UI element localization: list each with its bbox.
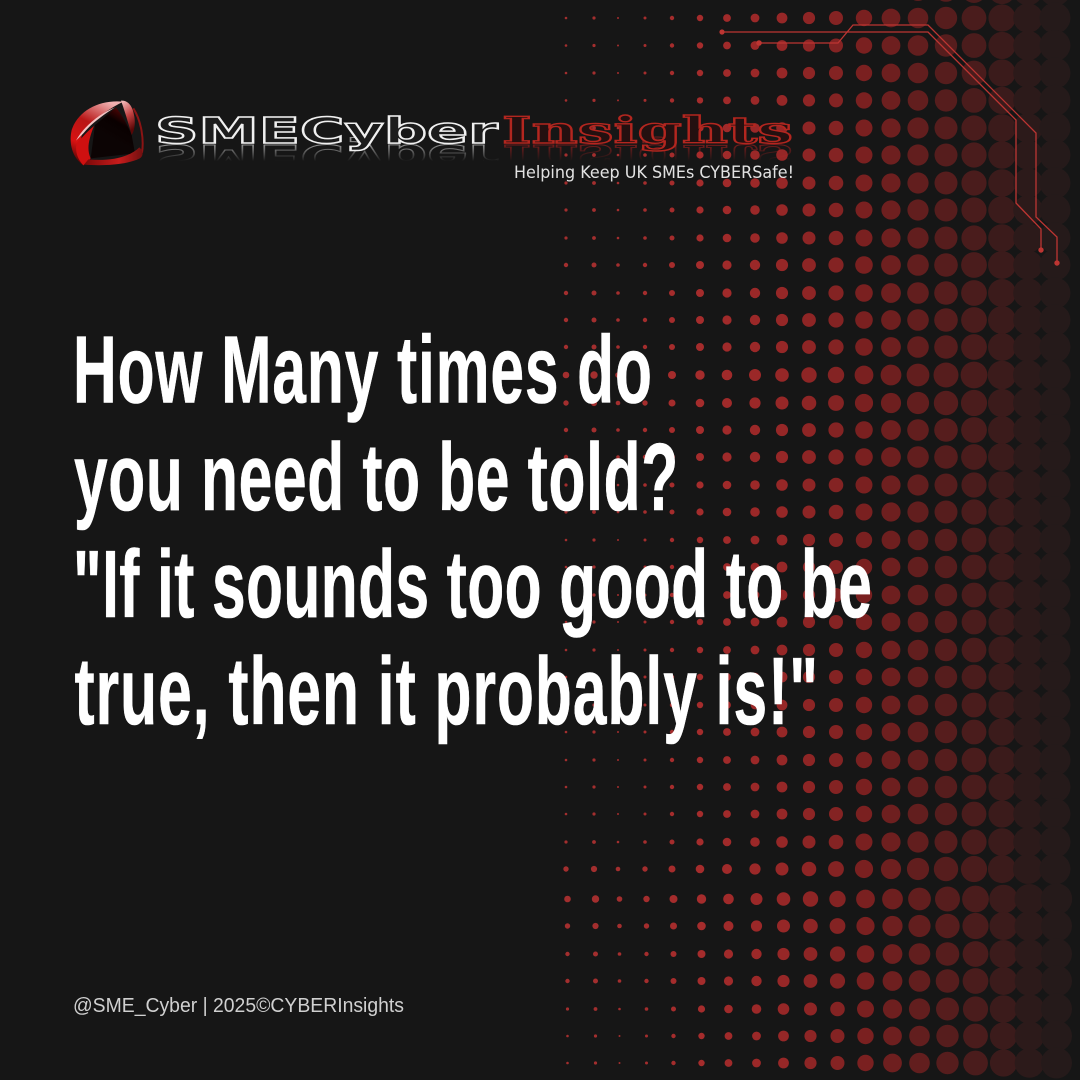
footer credit: @SME_Cyber | 2025©CYBERInsights <box>73 995 404 1017</box>
logo wordmark reflection <box>155 136 793 178</box>
title <box>73 316 872 746</box>
logo <box>71 101 793 178</box>
logo wordmark: Insights: Insights <box>502 110 793 152</box>
title: How Many times do <box>73 316 652 424</box>
title: you need to be told? <box>74 424 678 532</box>
logo tagline: Helping Keep UK SMEs CYBERSafe! <box>514 163 794 182</box>
logo wordmark reflection: Insights <box>502 136 793 178</box>
logo wordmark reflection: SMECyber <box>155 136 498 177</box>
logo wordmark: SMECyber: SMECyber <box>155 111 498 152</box>
circuit traces <box>719 25 1060 266</box>
halftone red dot field <box>563 0 1072 1079</box>
title: true, then it probably is!" <box>74 638 818 746</box>
icon: red ring emblem <box>71 101 143 165</box>
title: "If it sounds too good to be <box>73 531 872 639</box>
